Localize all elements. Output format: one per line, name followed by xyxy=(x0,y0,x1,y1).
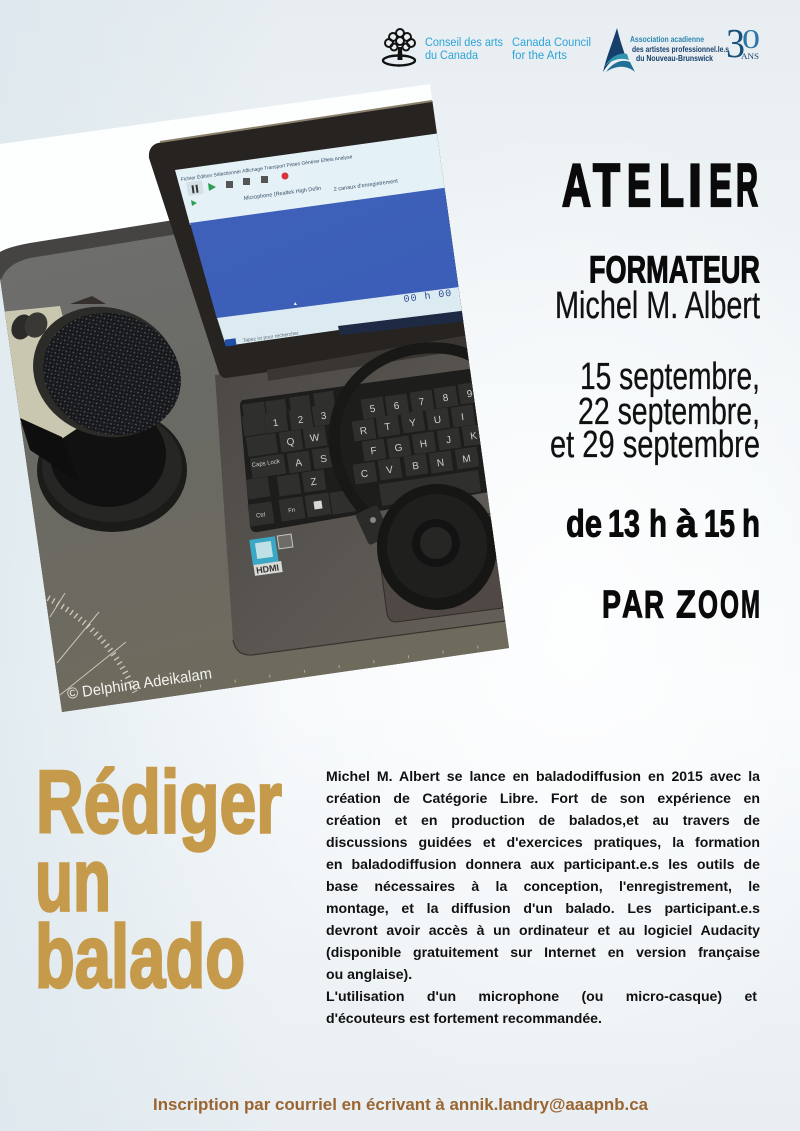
description text block: (disponible gratuitement sur Internet en version française xyxy=(326,944,760,960)
photo: laptop, microphone and headphones xyxy=(0,84,509,712)
ruler markings xyxy=(48,593,500,695)
dates xyxy=(550,356,760,466)
location: A xyxy=(622,584,643,626)
keyboard: C xyxy=(360,469,369,480)
laptop base xyxy=(215,335,520,655)
title: Rédiger un balado xyxy=(35,752,282,1006)
location: P xyxy=(602,584,621,626)
time: h xyxy=(649,504,667,546)
keyboard: 1 xyxy=(272,418,280,429)
keyboard: Y xyxy=(409,418,417,429)
laptop lid and screen: 00 h 00 m 00 xyxy=(403,283,488,306)
location: O xyxy=(720,584,739,626)
location: R xyxy=(644,584,664,626)
keyboard: B xyxy=(412,461,420,472)
logo: Association acadienne 30 ans: Association acadienne xyxy=(630,35,704,44)
keyboard: F xyxy=(370,446,377,457)
laptop lid and screen xyxy=(148,100,466,378)
description text block: Michel M. Albert se lance en baladodiffusion en 2015 avec la xyxy=(326,768,760,784)
blue track area xyxy=(190,188,458,319)
headphones xyxy=(334,348,515,610)
location xyxy=(602,584,760,626)
heading: ATELIER: I xyxy=(688,152,702,219)
heading: ATELIER: A xyxy=(562,152,591,219)
time: à xyxy=(676,504,698,546)
keyboard: 6 xyxy=(393,401,401,412)
keyboard: W xyxy=(309,432,321,445)
icon: windows key xyxy=(313,500,323,510)
keyboard: 2 xyxy=(297,415,305,426)
time xyxy=(566,504,760,546)
keyboard: Q xyxy=(286,436,295,449)
logo: Association acadienne 30 ans xyxy=(603,20,760,72)
description text block: en baladodiffusion donnera aux participant.e.s les outils de xyxy=(326,856,760,872)
icon: tree xyxy=(383,29,415,66)
trackpad xyxy=(376,512,503,622)
keyboard: U xyxy=(433,415,442,426)
keyboard: 7 xyxy=(418,397,426,408)
logo: Association acadienne 30 ans: des artistes professionnel.le.s xyxy=(632,45,729,54)
keyboard: T xyxy=(384,422,391,433)
logo: Conseil des arts du Canada: for the Arts xyxy=(512,48,567,62)
keyboard: N xyxy=(436,458,445,469)
description text block: ou anglaise). xyxy=(326,966,412,982)
keyboard: K xyxy=(470,431,478,442)
keyboard: Fn xyxy=(288,508,296,514)
heading: ATELIER: E xyxy=(627,152,651,219)
logo: Association acadienne 30 ans: 0 xyxy=(742,24,760,54)
description text block: création de Catégorie Libre. Fort de son expérience en xyxy=(326,790,760,806)
logo: Association acadienne 30 ans: ANS xyxy=(741,52,759,61)
keyboard: V xyxy=(386,465,394,476)
location: O xyxy=(698,584,718,626)
taskbar xyxy=(338,310,464,335)
keyboard: Caps Lock xyxy=(251,459,281,469)
keyboard xyxy=(240,368,488,532)
mic grille xyxy=(33,306,170,438)
keyboard: M xyxy=(462,453,472,466)
laptop lid and screen: Fichier Édition Sélectionner Affichage Transport Pistes Générer Effets Analyse xyxy=(180,153,353,183)
heading: ATELIER: R xyxy=(736,152,758,219)
keyboard: R xyxy=(359,426,368,437)
keyboard: I xyxy=(460,412,465,423)
desk mat xyxy=(0,196,509,712)
keyboard: Ctrl xyxy=(256,512,266,520)
time: 15 xyxy=(704,504,735,546)
laptop lid and screen: 2 canaux d'enregistrement xyxy=(333,178,399,193)
location: Z xyxy=(676,584,696,626)
title: Rédiger un balado: un xyxy=(35,830,111,930)
keyboard: J xyxy=(445,435,452,446)
logo: Conseil des arts du Canada: du Canada xyxy=(425,48,478,62)
ear cup xyxy=(377,484,497,610)
description text block: base nécessaires à la conception, l'enregistrement, le xyxy=(326,878,760,894)
description text block: discussions guidées et d'exercices pratiques, la formation xyxy=(326,834,760,850)
logo: Conseil des arts du Canada xyxy=(383,29,591,66)
logo: Association acadienne 30 ans: 3 xyxy=(726,20,745,66)
logo: Conseil des arts du Canada: Canada Council xyxy=(512,35,591,49)
description text block: création et en production de balados,et au travers de xyxy=(326,812,760,828)
keyboard: G xyxy=(394,442,403,455)
microphone xyxy=(4,296,187,532)
hinge xyxy=(356,506,384,544)
title: Rédiger un balado: balado xyxy=(35,906,245,1006)
logo: Conseil des arts du Canada: Conseil des arts xyxy=(425,35,503,49)
laptop lid and screen: Tapez ici pour rechercher xyxy=(242,331,299,344)
photo credit: © Delphina Adeikalam xyxy=(66,665,213,703)
keyboard: 3 xyxy=(320,411,328,422)
location: M xyxy=(741,584,760,626)
mic base xyxy=(37,422,187,532)
description text block: d'écouteurs est fortement recommandée. xyxy=(326,1010,602,1026)
keyboard: S xyxy=(320,454,328,465)
heading: ATELIER xyxy=(562,152,758,219)
stickers: intel and HDMI xyxy=(249,534,293,576)
keyboard: H xyxy=(419,439,428,450)
registration footer: Inscription par courriel en écrivant à annik.landry@aaapnb.ca xyxy=(153,1095,649,1114)
keyboard: Z xyxy=(310,477,317,488)
time: h xyxy=(742,504,760,546)
mic body xyxy=(4,306,77,438)
heading: ATELIER: E xyxy=(709,152,732,219)
time: 13 xyxy=(608,504,640,546)
keyboard: 9 xyxy=(466,389,474,400)
headband xyxy=(329,342,469,510)
logo: Association acadienne 30 ans: du Nouveau-Brunswick xyxy=(636,54,713,63)
title: Rédiger un balado: Rédiger xyxy=(36,752,282,852)
description text block: montage, et la diffusion d'un balado. Les participant.e.s xyxy=(326,900,760,916)
status bar xyxy=(217,287,462,344)
description text block: devront avoir accès à un ordinateur et au logiciel Audacity xyxy=(326,922,760,938)
heading: ATELIER: L xyxy=(659,152,684,219)
description text block xyxy=(326,768,760,1026)
keyboard: 5 xyxy=(369,404,377,415)
icon: sail xyxy=(603,28,635,72)
description text block: L'utilisation d'un microphone (ou micro-casque) et xyxy=(326,988,757,1004)
heading: ATELIER: T xyxy=(593,152,620,219)
laptop hinge xyxy=(267,336,468,381)
stickers: intel and HDMI: HDMI xyxy=(255,562,280,576)
keyboard: 8 xyxy=(442,393,450,404)
time: de xyxy=(566,504,602,546)
audacity toolbar xyxy=(175,134,445,225)
laptop lid and screen: Microphone (Realtek High Defin xyxy=(243,186,322,202)
keyboard: A xyxy=(295,458,303,469)
